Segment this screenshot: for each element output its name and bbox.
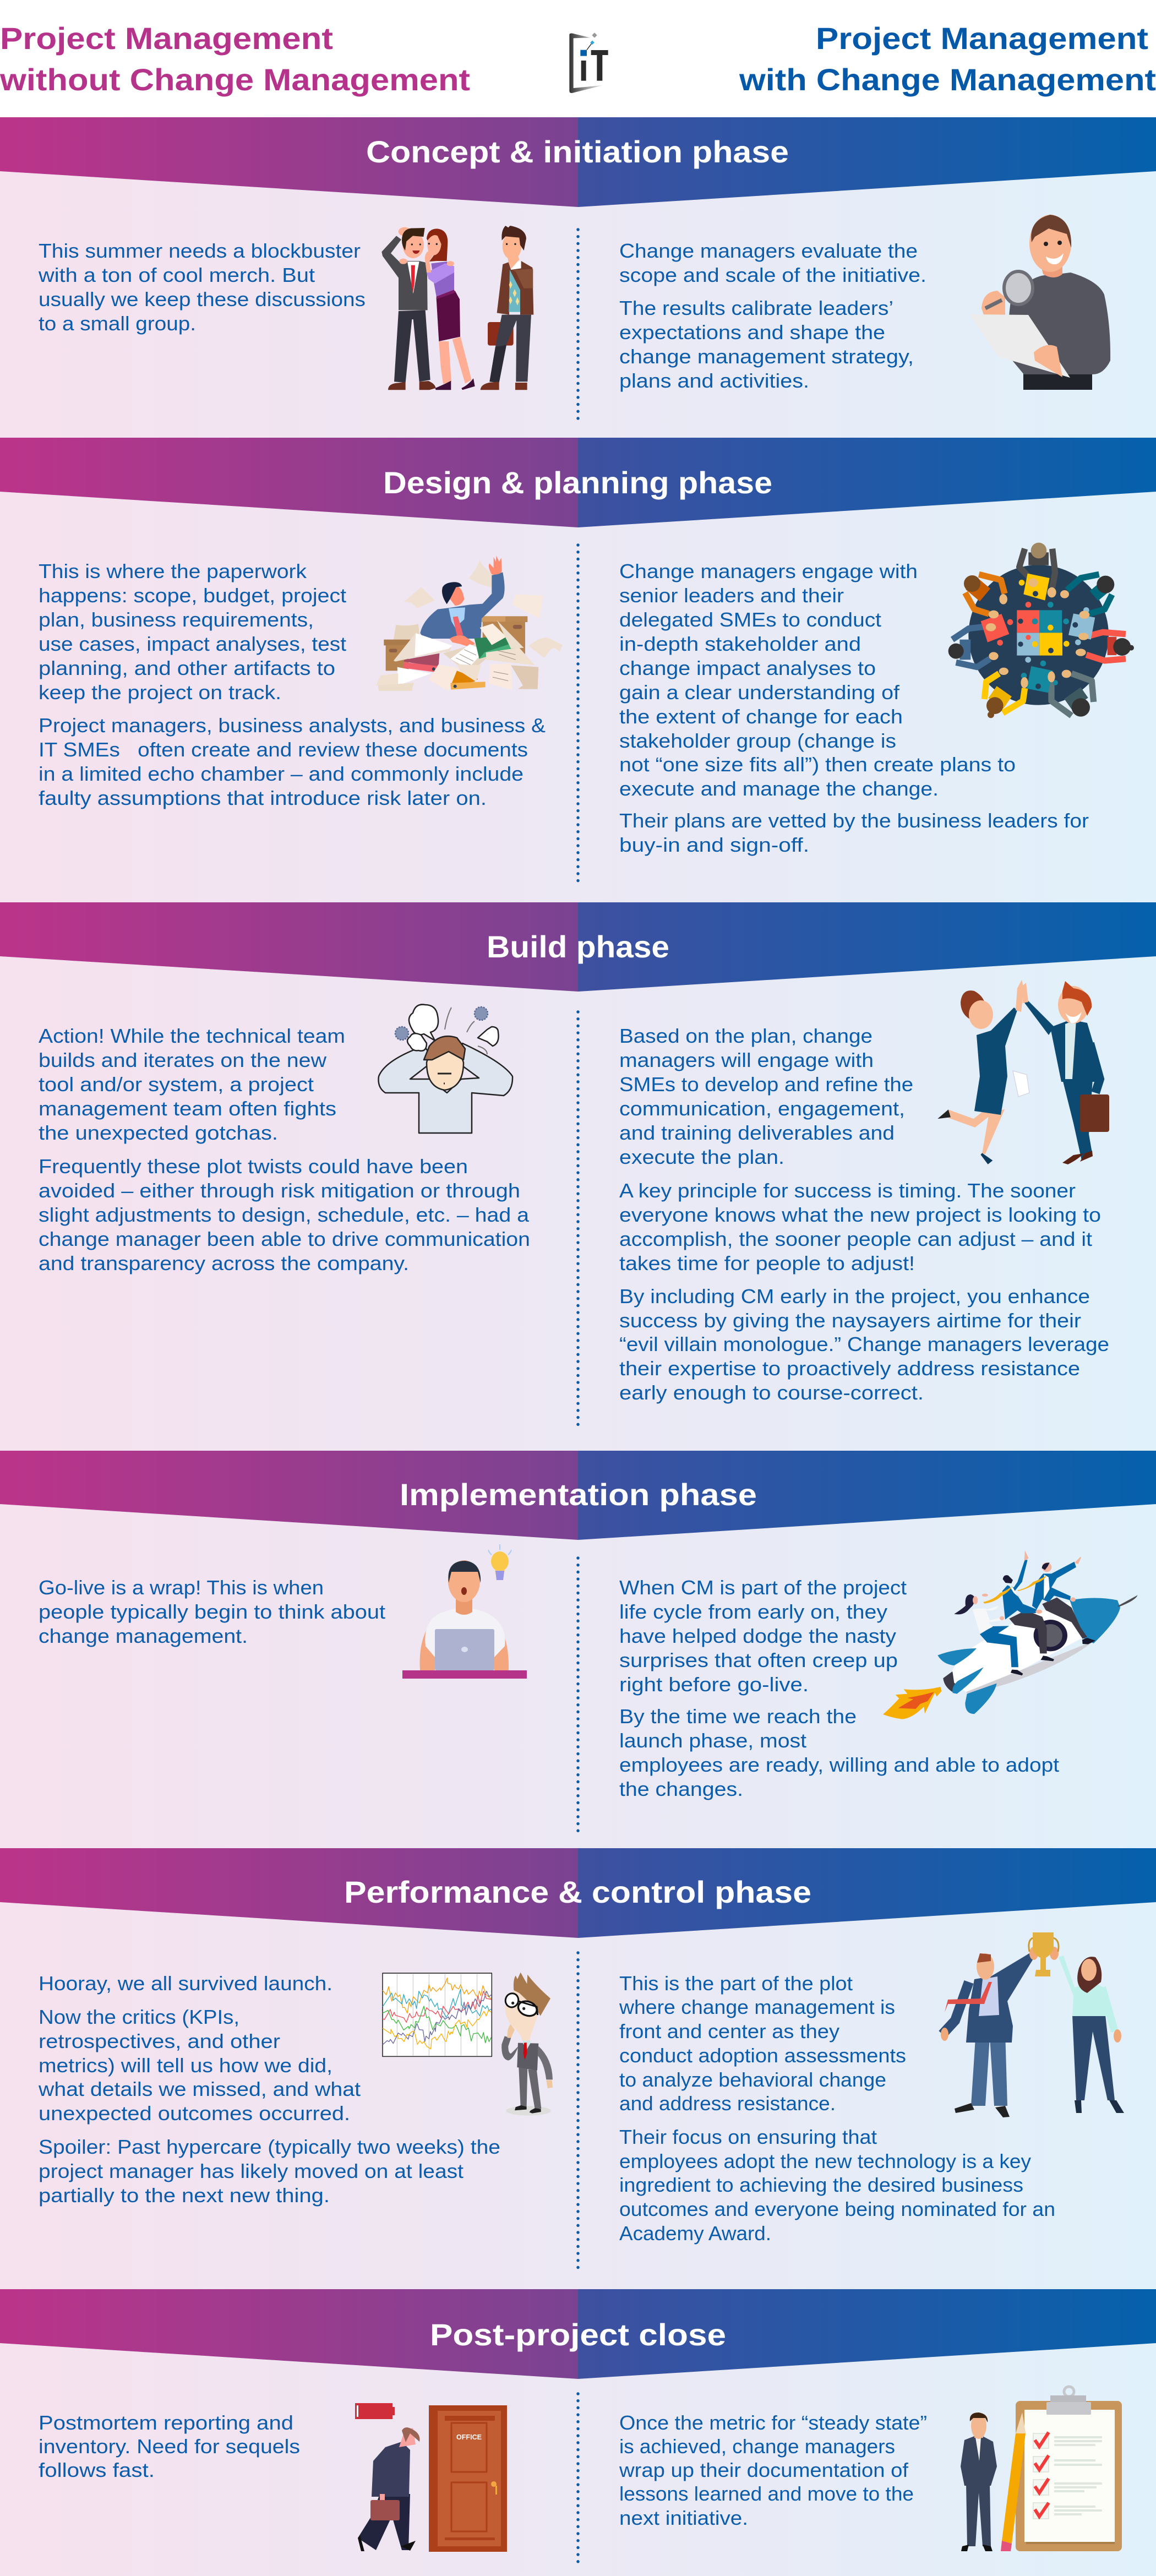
text: right column: everyone knows what the new project is looking to xyxy=(619,1203,1101,1226)
text: right column: Their focus on ensuring that xyxy=(619,2126,877,2148)
heading: without change management: Project Management xyxy=(0,21,333,56)
text: right column: plans and activities. xyxy=(619,369,809,392)
text: right column: and address resistance. xyxy=(619,2092,836,2115)
text: left column: builds and iterates on the new xyxy=(39,1049,327,1071)
text: right column xyxy=(619,560,1089,856)
text: left column: Action! While the technical team xyxy=(39,1025,345,1047)
heading: with change management: Project Management xyxy=(816,21,1148,56)
panel: performance and control phase xyxy=(0,1848,1156,2273)
text: left column: project manager has likely moved on at least xyxy=(39,2160,464,2182)
text: right column: in-depth stakeholder and xyxy=(619,633,861,655)
text: right column: not “one size fits all”) then create plans to xyxy=(619,753,1016,776)
text: right column: to analyze behavioral change xyxy=(619,2068,886,2091)
text: left column: use cases, impact analyses, test xyxy=(39,633,346,655)
phase heading: Build phase xyxy=(487,929,669,964)
text: right column: ingredient to achieving the desired business xyxy=(619,2174,1023,2196)
text: left column: planning, and other artifacts to xyxy=(39,657,335,679)
text: right column: By the time we reach the xyxy=(619,1705,857,1728)
text: left column: unexpected outcomes occurred. xyxy=(39,2102,350,2125)
text: left column: slight adjustments to design, schedule, etc. – had a xyxy=(39,1203,530,1226)
text: left column xyxy=(39,560,546,809)
text: right column: life cycle from early on, they xyxy=(619,1600,887,1623)
icon: man with glasses studying line chart xyxy=(383,1973,553,2116)
text: left column: with a ton of cool merch. But xyxy=(38,264,315,286)
text: right column: gain a clear understanding of xyxy=(619,681,900,704)
text: left column xyxy=(39,1025,530,1275)
text: right column: Once the metric for “steady state” xyxy=(619,2411,927,2434)
heading: with change management: with Change Management xyxy=(739,62,1156,97)
phase heading: Design & planning phase xyxy=(383,465,772,500)
text: right column: employees adopt the new technology is a key xyxy=(619,2150,1031,2172)
text: right column: change management strategy, xyxy=(619,345,914,368)
text: right column: senior leaders and their xyxy=(619,584,844,607)
heading: without change management xyxy=(0,21,470,97)
text: left column: Now the critics (KPIs, xyxy=(39,2006,239,2028)
text: right column: Academy Award. xyxy=(619,2222,771,2245)
text: left column: partially to the next new thing. xyxy=(39,2184,330,2207)
phase heading: Concept & initiation phase xyxy=(366,134,789,169)
text: right column: where change management is xyxy=(619,1996,895,2018)
text: right column: This is the part of the plot xyxy=(619,1972,853,1995)
icon: colleagues raising trophy xyxy=(941,1932,1124,2117)
text: left column: management team often fights xyxy=(39,1097,336,1120)
text: left column: keep the project on track. xyxy=(39,681,281,704)
text: right column: have helped dodge the nasty xyxy=(619,1625,896,1647)
text: right column: When CM is part of the project xyxy=(619,1576,907,1599)
text: right column: Change managers engage with xyxy=(619,560,918,582)
text: right column: the changes. xyxy=(619,1778,743,1800)
logo: iT xyxy=(569,32,608,93)
icon: stressed man holding head xyxy=(379,1005,512,1133)
header: page titles and logo xyxy=(0,21,1156,97)
text: right column xyxy=(619,2411,927,2529)
text: right column: conduct adoption assessments xyxy=(619,2044,906,2067)
text: left column: people typically begin to think about xyxy=(39,1600,385,1623)
text: right column: the extent of change for each xyxy=(619,705,903,728)
text: left column: change management. xyxy=(39,1625,248,1647)
banner xyxy=(0,2289,1156,2379)
text: right column: takes time for people to adjust! xyxy=(619,1252,915,1275)
icon: team riding rocket xyxy=(883,1553,1138,1719)
text: right column: A key principle for success is timing. The sooner xyxy=(619,1179,1076,1202)
text: left column: Spoiler: Past hypercare (typically two weeks) the xyxy=(39,2136,500,2158)
text: left column: change manager been able to drive communication xyxy=(39,1228,530,1250)
text: right column: delegated SMEs to conduct xyxy=(619,608,881,631)
text: right column: wrap up their documentation of xyxy=(619,2459,909,2481)
icon: tired man leaving through office door: OFFICE xyxy=(456,2433,482,2441)
text: left column: follows fast. xyxy=(39,2459,155,2481)
text: left column: Go-live is a wrap! This is when xyxy=(39,1576,324,1599)
icon: colleagues high five xyxy=(940,980,1109,1164)
text: left column: what details we missed, and what xyxy=(38,2078,361,2100)
text: left column: in a limited echo chamber – and commonly include xyxy=(39,763,524,785)
text: left column: tool and/or system, a project xyxy=(39,1073,314,1096)
text: left column: avoided – either through risk mitigation or through xyxy=(39,1179,520,1202)
text: left column xyxy=(38,239,366,335)
text: left column: Postmortem reporting and xyxy=(39,2411,293,2434)
text: right column: lessons learned and move to the xyxy=(619,2482,914,2505)
text: right column xyxy=(619,1576,1059,1800)
text: right column: success by giving the naysayers airtime for their xyxy=(619,1309,1081,1332)
text: right column: “evil villain monologue.” Change managers leverage xyxy=(619,1333,1109,1355)
text: right column: execute the plan. xyxy=(619,1146,784,1168)
text: right column: SMEs to develop and refine the xyxy=(619,1073,913,1096)
banner xyxy=(0,438,1156,527)
phase heading: Post-project close xyxy=(430,2317,726,2352)
text: right column: communication, engagement, xyxy=(619,1097,905,1120)
text: left column: to a small group. xyxy=(39,312,196,335)
icon: man at laptop with idea bulb xyxy=(402,1544,527,1679)
text: right column: execute and manage the change. xyxy=(619,777,939,800)
text: right column: change impact analyses to xyxy=(619,657,876,679)
text: right column: outcomes and everyone being nominated for an xyxy=(619,2198,1055,2220)
panel: design and planning phase xyxy=(0,438,1156,885)
text: right column: early enough to course-correct. xyxy=(619,1381,924,1404)
text: left column: the unexpected gotchas. xyxy=(39,1121,278,1144)
banner xyxy=(0,117,1156,207)
heading: without change management: without Change Management xyxy=(0,62,470,97)
banner xyxy=(0,902,1156,992)
text: left column: metrics) will tell us how we did, xyxy=(39,2054,332,2077)
text: right column: The results calibrate leaders’ xyxy=(619,297,893,319)
line chart xyxy=(383,1973,492,2056)
panel: concept and initiation phase xyxy=(0,117,1156,423)
text: right column: Their plans are vetted by the business leaders for xyxy=(619,809,1089,832)
text: right column: expectations and shape the xyxy=(619,321,885,344)
text: left column: IT SMEs often create and review these documents xyxy=(39,738,528,761)
text: left column: retrospectives, and other xyxy=(39,2030,280,2052)
text: right column: and training deliverables and xyxy=(619,1121,895,1144)
panel: post-project close xyxy=(0,2289,1156,2563)
text: left column: This is where the paperwork xyxy=(39,560,307,582)
panel: implementation phase xyxy=(0,1451,1156,1836)
text: right column xyxy=(619,1025,1109,1404)
text: left column: inventory. Need for sequels xyxy=(39,2435,300,2458)
icon: man buried in paperwork xyxy=(376,555,563,691)
icon: tired man leaving through office door xyxy=(355,2403,507,2552)
text: right column: managers will engage with xyxy=(619,1049,874,1071)
text: right column: front and center as they xyxy=(619,2020,839,2043)
text: left column: happens: scope, budget, project xyxy=(39,584,346,607)
text: left column: Project managers, business analysts, and business & xyxy=(39,714,546,737)
phase heading: Implementation phase xyxy=(400,1477,757,1512)
text: left column xyxy=(39,2411,300,2481)
text: right column: Based on the plan, change xyxy=(619,1025,873,1047)
text: right column: launch phase, most xyxy=(619,1729,806,1752)
text: left column: and transparency across the company. xyxy=(39,1252,409,1275)
icon: manager beside checklist clipboard and pencil xyxy=(961,2387,1122,2551)
text: right column: next initiative. xyxy=(619,2507,748,2529)
text: left column xyxy=(38,1972,500,2207)
text: left column: Frequently these plot twists could have been xyxy=(39,1155,468,1178)
text: right column: is achieved, change managers xyxy=(619,2435,895,2458)
text: right column: scope and scale of the initiative. xyxy=(619,264,926,286)
icon: three colleagues whispering xyxy=(381,226,533,390)
text: right column: Change managers evaluate the xyxy=(619,239,918,262)
heading: with change management xyxy=(739,21,1156,97)
text: right column: accomplish, the sooner people can adjust – and it xyxy=(619,1228,1092,1250)
text: right column: buy-in and sign-off. xyxy=(619,834,809,856)
text: left column: plan, business requirements, xyxy=(39,608,314,631)
text: left column xyxy=(39,1576,385,1647)
panel: build phase xyxy=(0,902,1156,1428)
text: right column: stakeholder group (change is xyxy=(619,729,896,752)
text: right column: their expertise to proactively address resistance xyxy=(619,1357,1080,1380)
banner xyxy=(0,1848,1156,1938)
text: left column: faulty assumptions that introduce risk later on. xyxy=(39,787,487,809)
text: right column: employees are ready, willing and able to adopt xyxy=(619,1753,1059,1776)
text: left column: Hooray, we all survived launch. xyxy=(39,1972,332,1995)
text: right column: right before go-live. xyxy=(619,1673,809,1696)
phase heading: Performance & control phase xyxy=(344,1875,811,1909)
text: right column xyxy=(619,239,926,392)
text: left column: usually we keep these discussions xyxy=(39,288,366,311)
icon: man with magnifier and paper xyxy=(969,215,1110,390)
banner xyxy=(0,1451,1156,1540)
text: left column: This summer needs a blockbuster xyxy=(39,239,361,262)
text: right column: surprises that often creep up xyxy=(619,1649,898,1671)
text: right column xyxy=(619,1972,1055,2245)
icon: team assembling puzzle at round table xyxy=(948,543,1134,718)
text: right column: By including CM early in the project, you enhance xyxy=(619,1285,1090,1308)
